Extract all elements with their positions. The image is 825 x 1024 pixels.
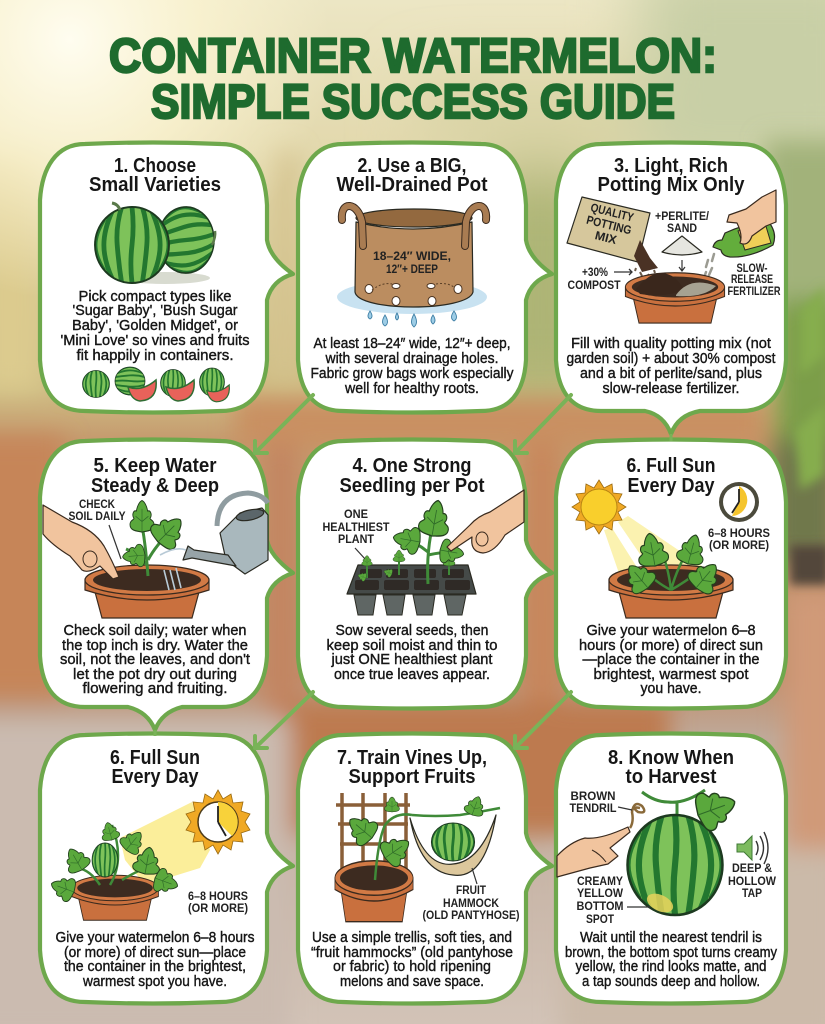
title: SIMPLE SUCCESS GUIDE: [151, 76, 675, 129]
heading: step 4: [340, 455, 485, 497]
text: step 1 description: [60, 288, 250, 364]
icon: small melon varieties: [82, 367, 229, 402]
label: creamy yellow bottom spot: YELLOW: [577, 886, 624, 900]
label: brown tendril: [570, 789, 632, 815]
heading: step 6: Every Day: [628, 475, 715, 497]
label: hours: [188, 889, 248, 915]
icon: perlite pile: [655, 209, 710, 271]
icon: healthiest seedling: [391, 498, 466, 584]
text: step 6 repeat description: warmest spot you have.: [82, 973, 227, 990]
panel: 7 train vines up: [298, 734, 552, 1004]
label: deep and hollow tap: DEEP &: [732, 861, 772, 875]
heading: step 3: 3. Light, Rich: [614, 155, 728, 177]
heading: step 6 repeat: 6. Full Sun: [110, 747, 200, 769]
text: step 2 description: with several drainage holes.: [325, 350, 498, 367]
text: step 5 description: let the pot dry out during: [73, 666, 237, 683]
text: step 3 description: slow-release fertilizer.: [602, 380, 740, 397]
label: deep and hollow tap: [728, 861, 777, 900]
heading: step 7: 7. Train Vines Up,: [337, 747, 487, 769]
heading: step 8: to Harvest: [626, 766, 717, 788]
text: step 7 description: melons and save space.: [340, 973, 484, 990]
text: step 2 description: Fabric grow bags work especially: [310, 365, 514, 382]
label: hours: (OR MORE): [709, 538, 769, 552]
arrow: tail of step 5 into bottom row: [154, 730, 156, 736]
label: slow-release fertilizer: FERTILIZER: [728, 284, 781, 298]
label: compost: [568, 265, 632, 292]
icon: potting mix bag: POTTING: [585, 213, 633, 237]
icon: seedling tray: [347, 550, 476, 615]
arrow: step 3 to next row: [515, 395, 571, 453]
heading: step 4: Seedling per Pot: [340, 475, 485, 497]
heading: step 2: 2. Use a BIG,: [358, 155, 466, 177]
text: step 8 description: brown, the bottom spot turns creamy: [565, 944, 777, 961]
text: step 6 description: hours (or more) of direct sun: [579, 637, 763, 654]
text: step 6 description: [579, 622, 763, 697]
heading: step 7: Support Fruits: [348, 766, 476, 788]
icon: fabric grow bag with drainage: [337, 206, 487, 327]
panel: 6 full sun (middle row): [556, 440, 786, 708]
panel: 1 choose small varieties: [40, 142, 293, 412]
heading: step 2: [336, 155, 488, 196]
icon: clock: [719, 482, 759, 522]
heading: step 8: [608, 747, 734, 788]
text: step 6 repeat description: (or more) of direct sun—place: [64, 944, 246, 961]
icon: watering can: [160, 493, 268, 590]
label: one healthiest plant: PLANT: [338, 532, 375, 546]
heading: step 1: [89, 155, 221, 196]
icon: pointing hand: [447, 490, 524, 553]
text: step 8 description: Wait until the nearest tendril is: [580, 929, 762, 946]
heading: step 6 repeat: Every Day: [112, 766, 199, 788]
icon: ripe watermelon with vine: [628, 783, 741, 916]
label: slow-release fertilizer: RELEASE: [731, 272, 773, 286]
text: step 7 description: or fabric) to hold ripening: [333, 958, 491, 975]
heading: step 6: [626, 455, 716, 497]
text: step 1 description: Baby', 'Golden Midget', or: [72, 317, 238, 334]
text: step 6 description: you have.: [640, 680, 702, 697]
text: step 6 repeat description: Give your watermelon 6–8 hours: [56, 929, 254, 946]
heading: step 5: Steady & Deep: [91, 475, 219, 497]
text: step 4 description: once true leaves appear.: [334, 666, 490, 683]
text: step 3 description: Fill with quality potting mix (not: [571, 335, 772, 352]
panel: 6 full sun (bottom row): [40, 734, 293, 1004]
text: step 8 description: [565, 929, 777, 990]
text: step 3 description: garden soil) + about 30% compost: [566, 350, 776, 367]
text: step 4 description: Sow several seeds, then: [336, 622, 488, 639]
heading: step 6: 6. Full Sun: [626, 455, 716, 477]
heading: step 3: [598, 155, 745, 196]
heading: step 5: 5. Keep Water: [94, 455, 217, 477]
label: one healthiest plant: ONE: [344, 507, 368, 521]
label: bag dimensions: 12″+ DEEP: [386, 262, 438, 276]
icon: potting mix bag: QUALITY: [589, 200, 635, 225]
text: step 1 description: 'Mini Love' so vines and fruits: [60, 332, 250, 349]
icon: hand touching tendril: [557, 827, 630, 877]
heading: step 7: [337, 747, 487, 788]
label: brown tendril: BROWN: [570, 789, 616, 803]
text: step 2 description: At least 18–24″ wide, 12″+ deep,: [314, 335, 510, 352]
label: compost: COMPOST: [568, 278, 621, 292]
panel: 2 big well-drained pot: [298, 142, 552, 412]
label: brown tendril: TENDRIL: [570, 801, 616, 815]
heading: step 3: Potting Mix Only: [598, 174, 745, 196]
label: fruit hammock: (OLD PANTYHOSE): [422, 908, 520, 922]
panel: 4 one strong seedling: [298, 440, 552, 708]
text: step 6 repeat description: the container in the brightest,: [64, 958, 246, 975]
label: one healthiest plant: HEALTHIEST: [322, 520, 390, 534]
heading: step 6 repeat: [110, 747, 200, 788]
title: CONTAINER WATERMELON:: [109, 30, 717, 83]
text: step 1 description: Pick compact types like: [78, 288, 232, 305]
label: hours: (OR MORE): [188, 901, 248, 915]
text: step 8 description: yellow, the rind looks matte, and: [576, 958, 766, 975]
heading: step 2: Well-Drained Pot: [336, 174, 488, 196]
icon: trellis with vine and pot: [335, 793, 417, 922]
heading: step 1: 1. Choose: [114, 155, 196, 177]
text: step 4 description: just ONE healthiest plant: [331, 651, 493, 668]
label: fruit hammock: HAMMOCK: [443, 896, 499, 910]
text: step 5 description: soil, not the leaves, and don't: [60, 651, 251, 668]
label: bag dimensions: 18–24″ WIDE,: [373, 249, 451, 263]
label: slow-release fertilizer: [728, 261, 781, 298]
icon: potting mix bag: [567, 197, 658, 277]
label: slow-release fertilizer: SLOW-: [736, 261, 768, 275]
label: check soil daily: CHECK: [79, 497, 115, 511]
icon: pot with plant: [609, 531, 733, 618]
label: creamy yellow bottom spot: SPOT: [586, 912, 615, 926]
text: step 3 description: [566, 335, 776, 397]
label: fruit hammock: [422, 883, 520, 922]
text: step 2 description: well for healthy roots.: [344, 380, 479, 397]
text: step 8 description: a tap sounds deep and hollow.: [582, 973, 760, 990]
label: hours: 6–8 HOURS: [188, 889, 248, 903]
icon: speaker sound: [737, 832, 768, 864]
text: step 1 description: fit happily in containers.: [76, 347, 234, 364]
arrow: tail of step 3 into step 6: [670, 434, 672, 441]
label: one healthiest plant: [322, 507, 390, 560]
label: deep and hollow tap: TAP: [742, 886, 762, 900]
arrow: step 2 to step 4 row: [255, 395, 313, 453]
panel: 3 light rich potting mix: [556, 142, 786, 434]
heading: step 8: 8. Know When: [608, 747, 734, 769]
icon: pot with compost and perlite: [625, 273, 725, 323]
icon: two watermelons: [95, 202, 218, 284]
text: step 5 description: flowering and fruiting.: [82, 680, 228, 697]
label: creamy yellow bottom spot: BOTTOM: [576, 899, 624, 913]
text: step 5 description: the top inch is dry. Water the: [62, 637, 248, 654]
text: step 2 description: [310, 335, 514, 397]
icon: potting mix bag: MIX: [593, 228, 618, 247]
title: [109, 30, 717, 129]
text: step 3 description: and a bit of perlite/sand, plus: [580, 365, 762, 382]
panel: 8 know when to harvest: [556, 734, 786, 1004]
icon: perlite pile: +PERLITE/: [655, 209, 710, 223]
text: step 5 description: [60, 622, 251, 697]
text: step 7 description: “fruit hammocks” (old pantyhose: [311, 944, 513, 961]
icon: hand testing soil: [43, 505, 119, 579]
heading: step 4: 4. One Strong: [352, 455, 472, 477]
label: check soil daily: SOIL DAILY: [68, 509, 126, 523]
icon: sun beam: [120, 790, 250, 885]
text: step 1 description: 'Sugar Baby', 'Bush Sugar: [72, 302, 238, 319]
label: fruit hammock: FRUIT: [456, 883, 487, 897]
label: hours: 6–8 HOURS: [708, 526, 770, 540]
text: step 6 description: Give your watermelon 6–8: [586, 622, 756, 639]
text: step 6 description: —place the container in the: [582, 651, 760, 668]
panel: 5 keep water steady: [40, 440, 293, 730]
label: hours: [708, 526, 770, 552]
label: compost: +30%: [582, 265, 608, 279]
icon: perlite pile: SAND: [667, 221, 697, 235]
label: creamy yellow bottom spot: CREAMY: [577, 874, 623, 888]
text: step 6 description: brightest, warmest spot: [594, 666, 749, 683]
arrow: step 6 to bottom row: [515, 692, 571, 748]
icon: sun rays: [572, 480, 702, 582]
icon: hand pouring fertilizer bottle: [704, 190, 776, 278]
label: creamy yellow bottom spot: [576, 874, 650, 926]
icon: pot with seedling: [85, 500, 209, 618]
text: step 7 description: [311, 929, 513, 990]
heading: step 1: Small Varieties: [89, 174, 221, 196]
arrow: step 4 to bottom row: [255, 692, 313, 748]
label: check soil daily: [68, 497, 126, 559]
text: step 4 description: keep soil moist and thin to: [326, 637, 498, 654]
label: deep and hollow tap: HOLLOW: [728, 874, 777, 888]
icon: pot with melon plant: [47, 820, 182, 920]
icon: fruit hammock: [410, 793, 500, 884]
label: bag dimensions: [373, 249, 451, 276]
text: step 7 description: Use a simple trellis, soft ties, and: [312, 929, 512, 946]
text: step 5 description: Check soil daily; water when: [64, 622, 246, 639]
text: step 4 description: [326, 622, 498, 683]
text: step 6 repeat description: [56, 929, 254, 990]
heading: step 5: [91, 455, 219, 497]
